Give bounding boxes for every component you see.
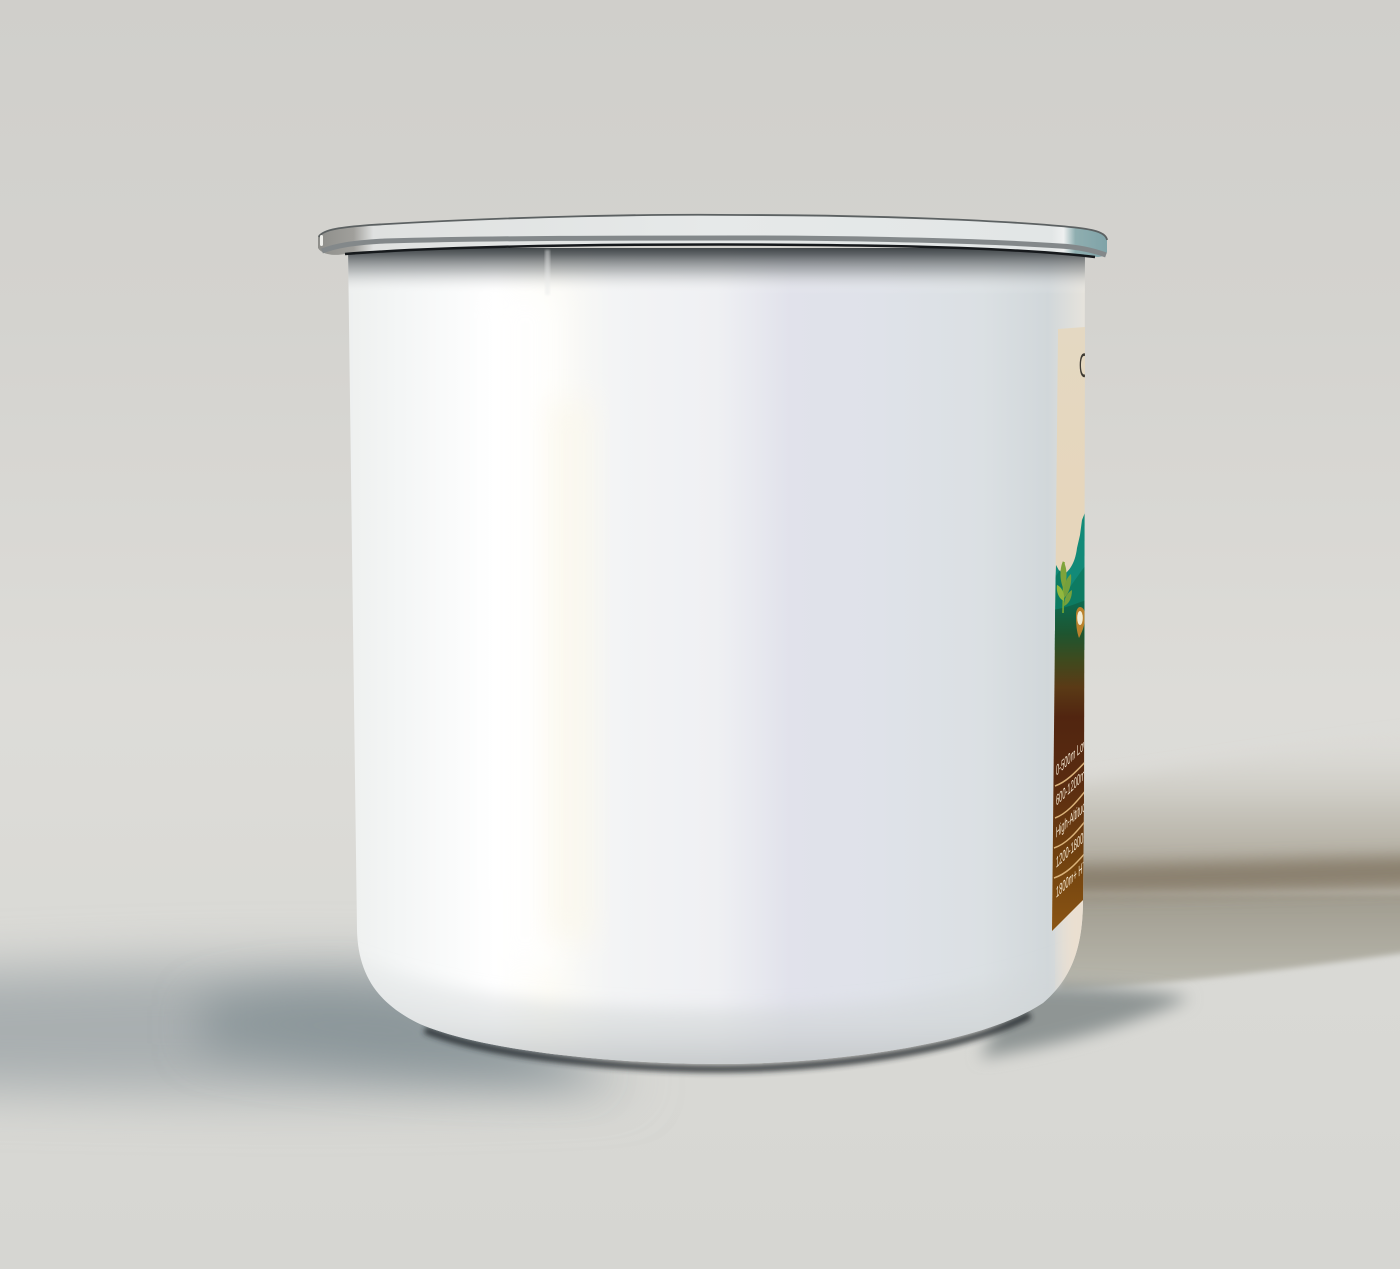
mug bottom curve shading (370, 980, 1027, 1064)
mountain illustration (1053, 510, 1086, 640)
altitude row 5: 1800m+ HT (1056, 856, 1086, 902)
mug rim (318, 215, 1107, 257)
printed label wrapped around right side of mug (1052, 327, 1085, 931)
altitude row 2: 600-1200m Mid (1056, 755, 1096, 810)
cast shadow: left blue-grey (0, 963, 640, 1094)
soil and altitude band (1052, 600, 1084, 931)
label paper (1052, 327, 1085, 931)
mug body (340, 244, 1100, 1080)
icon: coffee leaf sprig (1057, 561, 1072, 613)
altitude row 3: High-Altitude (1056, 793, 1089, 842)
altitude list (1056, 742, 1084, 898)
altitude row 1: 0-500m Lowland (1056, 722, 1098, 780)
altitude dividers (1054, 761, 1086, 878)
soft vertical highlight (490, 290, 560, 970)
rim shadow under lip (348, 248, 1085, 286)
altitude row 4: 1200-1800m (1056, 824, 1088, 872)
label heading fragment: C (1079, 348, 1089, 385)
cast shadow: right warm band (980, 725, 1400, 1058)
icon: map pin (1076, 607, 1085, 638)
contact shadow under mug (425, 1015, 1030, 1069)
warm reflection on right edge (1060, 900, 1083, 984)
